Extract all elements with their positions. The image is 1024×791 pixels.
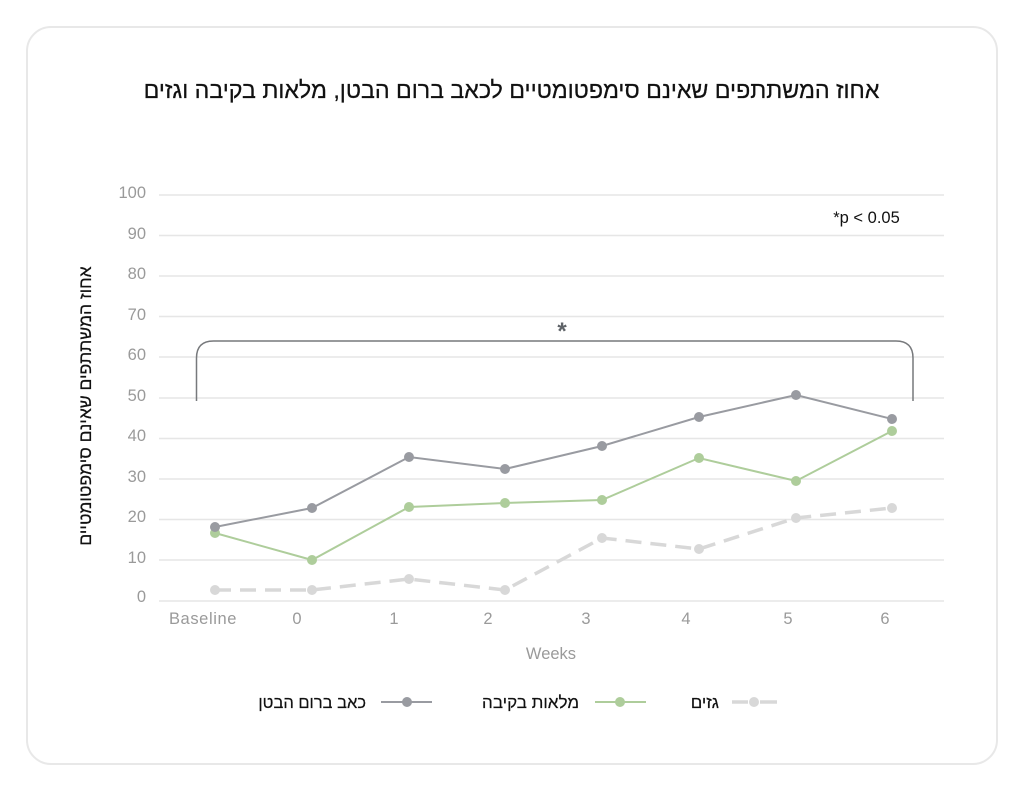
legend item: gas bbox=[691, 693, 777, 712]
y axis tick labels: 10 bbox=[128, 549, 146, 567]
y axis tick labels bbox=[118, 184, 146, 606]
y axis tick labels: 40 bbox=[128, 427, 146, 445]
x axis tick labels: 6 bbox=[880, 610, 890, 628]
legend item: upper abdominal pain bbox=[258, 694, 432, 712]
y axis tick labels: 50 bbox=[128, 387, 146, 405]
y axis tick labels: 70 bbox=[128, 306, 146, 324]
x axis tick labels: 1 bbox=[389, 610, 399, 628]
y axis tick labels: 30 bbox=[128, 468, 146, 486]
series: upper abdominal pain bbox=[210, 390, 897, 532]
significance bracket bbox=[196, 318, 913, 401]
y axis tick labels: 90 bbox=[128, 225, 146, 243]
legend bbox=[258, 693, 777, 712]
legend item: stomach fullness: מלאות בקיבה bbox=[482, 693, 579, 712]
y axis tick labels: 0 bbox=[137, 588, 146, 606]
x axis title: Weeks bbox=[526, 645, 576, 663]
legend item: gas: גזים bbox=[691, 693, 719, 712]
x axis tick labels: 0 bbox=[292, 610, 302, 628]
y axis tick labels: 100 bbox=[118, 184, 146, 202]
y axis tick labels: 60 bbox=[128, 346, 146, 364]
x axis tick labels: 5 bbox=[783, 610, 793, 628]
y axis tick labels: 80 bbox=[128, 265, 146, 283]
x axis tick labels: 2 bbox=[483, 610, 493, 628]
legend item: upper abdominal pain: כאב ברום הבטן bbox=[258, 694, 366, 712]
x axis tick labels: Baseline bbox=[169, 610, 237, 628]
p value note: *p < 0.05 bbox=[833, 209, 900, 227]
x axis tick labels: 3 bbox=[581, 610, 591, 628]
title: אחוז המשתתפים שאינם סימפטומטיים לכאב ברום הבטן, מלאות בקיבה וגזים bbox=[144, 77, 880, 103]
y axis title: אחוז המשתתפים שאינם סימפטומטיים bbox=[75, 266, 95, 546]
x axis tick labels: 4 bbox=[681, 610, 691, 628]
x axis tick labels bbox=[169, 610, 890, 628]
legend item: stomach fullness bbox=[482, 693, 646, 712]
series: stomach fullness bbox=[210, 426, 897, 565]
y axis tick labels: 20 bbox=[128, 508, 146, 526]
series: gas bbox=[210, 503, 897, 595]
significance asterisk: * bbox=[557, 318, 567, 345]
